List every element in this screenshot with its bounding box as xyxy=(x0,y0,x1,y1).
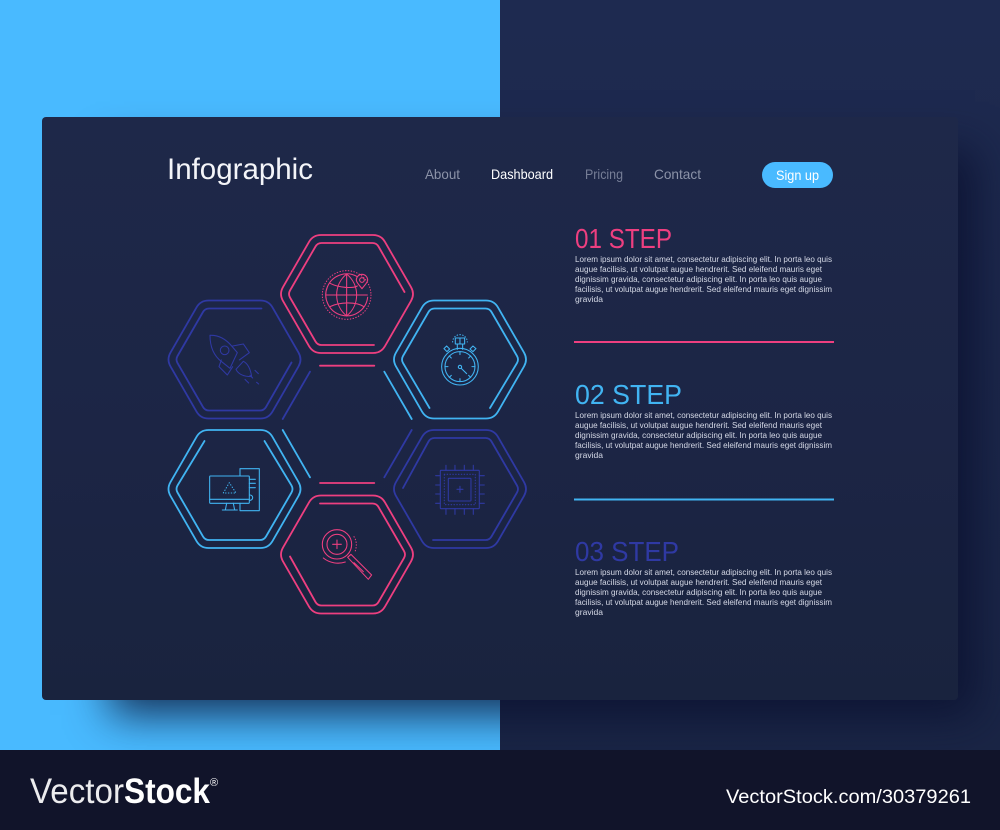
body text: step 03: augue facilisis, ut volutpat augue hendrerit. Sed eleifend mauris eget xyxy=(575,577,823,587)
hexagon: rocket (dark blue) xyxy=(168,300,300,418)
body text: step 03: dignissim gravida, consectetur adipiscing elit. In porta leo quis augue xyxy=(575,587,822,597)
footer logo: ® xyxy=(210,777,218,789)
hexagon: monitor (light blue) xyxy=(168,430,300,548)
body text: step 01: Lorem ipsum dolor sit amet, consectetur adipiscing elit. In porta leo quis xyxy=(575,254,832,264)
footer bar xyxy=(0,750,1000,830)
body text: step 03: facilisis, ut volutpat augue hendrerit. Sed eleifend mauris eget dignissim xyxy=(575,597,832,607)
step 03 block xyxy=(575,536,832,617)
footer logo: Stock xyxy=(124,772,210,811)
icon: stopwatch xyxy=(442,335,478,385)
title: Infographic xyxy=(167,153,313,186)
icon: magnifying glass xyxy=(322,530,372,579)
body text: step 02: gravida xyxy=(575,450,603,460)
nav: Dashboard: Dashboard xyxy=(491,166,553,182)
nav: About: About xyxy=(425,166,460,182)
nav: Pricing: Pricing xyxy=(585,166,623,182)
background: light blue panel xyxy=(0,0,500,750)
body text: step 01 xyxy=(575,254,832,304)
step 01 block xyxy=(575,223,832,304)
icon: globe with pin xyxy=(322,271,371,319)
background: dark navy panel xyxy=(500,0,1000,750)
body text: step 02: facilisis, ut volutpat augue hendrerit. Sed eleifend mauris eget dignissim xyxy=(575,440,832,450)
body text: step 03 xyxy=(575,567,832,617)
icon: desktop computer xyxy=(210,469,259,511)
connector lines between hexagons xyxy=(283,366,412,483)
icon: rocket xyxy=(210,335,259,384)
body text: step 01: facilisis, ut volutpat augue hendrerit. Sed eleifend mauris eget dignissim xyxy=(575,284,832,294)
body text: step 01: gravida xyxy=(575,294,603,304)
icon: processor chip xyxy=(436,465,484,514)
hexagon: stopwatch (light blue) xyxy=(394,300,526,418)
body text: step 02: dignissim gravida, consectetur adipiscing elit. In porta leo quis augue xyxy=(575,430,822,440)
heading: 02 STEP: 02 STEP xyxy=(575,379,682,410)
body text: step 03: gravida xyxy=(575,607,603,617)
footer image id: VectorStock.com/30379261 xyxy=(726,787,971,808)
navigation menu xyxy=(425,166,701,182)
sign up button xyxy=(762,162,833,188)
divider: light blue xyxy=(574,498,834,500)
sign up button: Sign up xyxy=(776,167,819,183)
main card panel xyxy=(42,117,958,700)
body text: step 03: Lorem ipsum dolor sit amet, consectetur adipiscing elit. In porta leo quis xyxy=(575,567,832,577)
footer logo xyxy=(30,772,218,811)
divider: pink xyxy=(574,341,834,343)
hexagon: chip (dark blue) xyxy=(394,430,526,548)
nav: Contact: Contact xyxy=(654,166,701,182)
step 02 block xyxy=(575,379,832,460)
hexagon: magnifier (pink) xyxy=(281,496,413,614)
body text: step 02: augue facilisis, ut volutpat augue hendrerit. Sed eleifend mauris eget xyxy=(575,420,823,430)
body text: step 02 xyxy=(575,410,832,460)
hexagon: globe (pink) xyxy=(281,235,413,353)
heading: 03 STEP: 03 STEP xyxy=(575,536,679,567)
body text: step 01: dignissim gravida, consectetur adipiscing elit. In porta leo quis augue xyxy=(575,274,822,284)
heading: 01 STEP: 01 STEP xyxy=(575,223,672,254)
body text: step 02: Lorem ipsum dolor sit amet, consectetur adipiscing elit. In porta leo quis xyxy=(575,410,832,420)
footer logo: Vector xyxy=(30,772,124,811)
body text: step 01: augue facilisis, ut volutpat augue hendrerit. Sed eleifend mauris eget xyxy=(575,264,823,274)
